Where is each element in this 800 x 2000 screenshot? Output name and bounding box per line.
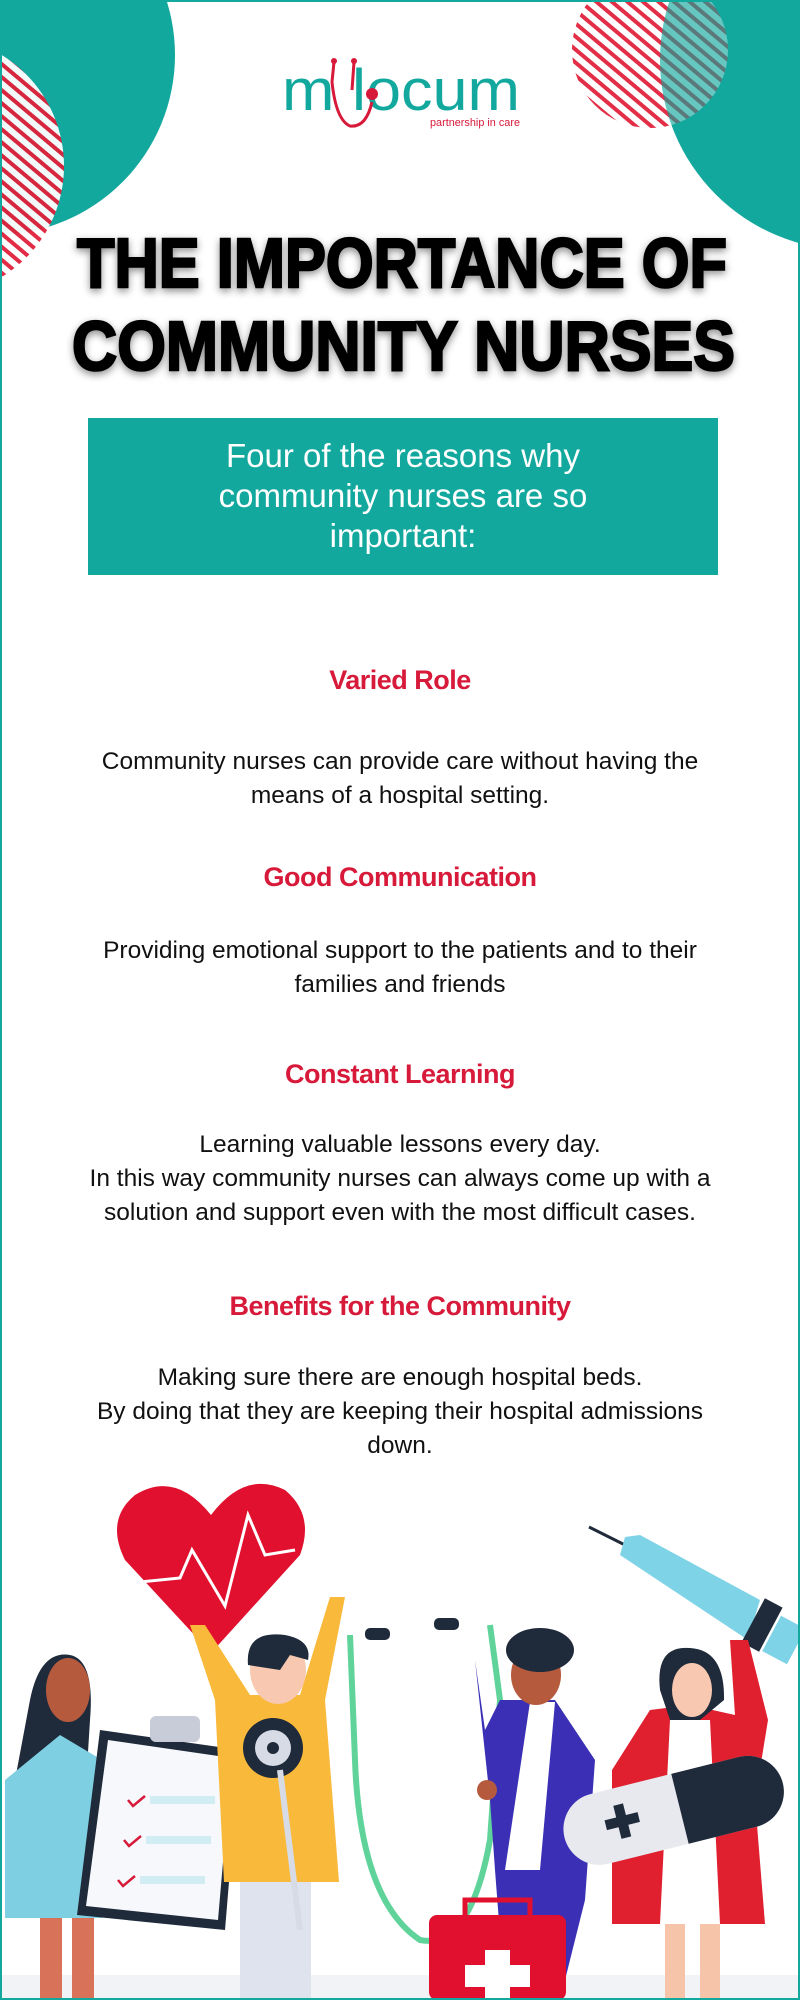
section: Constant Learning: Constant Learning — [285, 1059, 515, 1089]
title — [68, 224, 739, 385]
title: THE IMPORTANCE OF — [77, 224, 727, 302]
icon: first aid kit — [429, 1900, 566, 2000]
logo: m locum — [282, 58, 520, 123]
body: Community nurses can provide care without having the — [102, 748, 698, 775]
icon: syringe — [589, 1527, 800, 1664]
body: means of a hospital setting. — [251, 782, 549, 809]
section: Benefits for the Community: Benefits for the Community — [229, 1291, 571, 1321]
section: Benefits for the Community: By doing that they are keeping their hospital admissions — [97, 1398, 703, 1425]
heading: Varied Role — [329, 665, 471, 695]
section: Good Communication: Providing emotional support to the patients and to their — [103, 937, 697, 964]
section: Good Communication — [103, 862, 697, 998]
section: Constant Learning — [90, 1059, 710, 1226]
section: Benefits for the Community: down. — [367, 1432, 433, 1459]
section: Constant Learning: solution and support even with the most difficult cases. — [104, 1199, 696, 1226]
figure: blue man — [475, 1628, 595, 2000]
section: Benefits for the Community — [97, 1291, 703, 1459]
logo: partnership in care — [430, 117, 520, 129]
intro box — [88, 418, 718, 575]
section: Benefits for the Community: Making sure there are enough hospital beds. — [158, 1364, 642, 1391]
section: Good Communication: families and friends — [294, 971, 506, 998]
section: Constant Learning: In this way community nurses can always come up with a — [90, 1165, 710, 1192]
section: Varied Role — [102, 665, 698, 809]
intro box: community nurses are so — [219, 477, 587, 514]
intro box: Four of the reasons why — [226, 437, 580, 474]
icon: heart — [117, 1484, 305, 1653]
decorative background circles — [2, 2, 798, 276]
body — [102, 748, 698, 809]
section: Good Communication: Good Communication — [264, 862, 536, 892]
section: Constant Learning: Learning valuable lessons every day. — [199, 1131, 601, 1158]
intro box: important: — [330, 517, 476, 554]
title: COMMUNITY NURSES — [72, 307, 735, 385]
figure: red woman with pill — [556, 1640, 792, 2000]
figure: left woman with clipboard — [5, 1655, 240, 2000]
figure: yellow man with stethoscope — [190, 1597, 500, 2000]
illustration: medical team — [2, 1484, 798, 1998]
